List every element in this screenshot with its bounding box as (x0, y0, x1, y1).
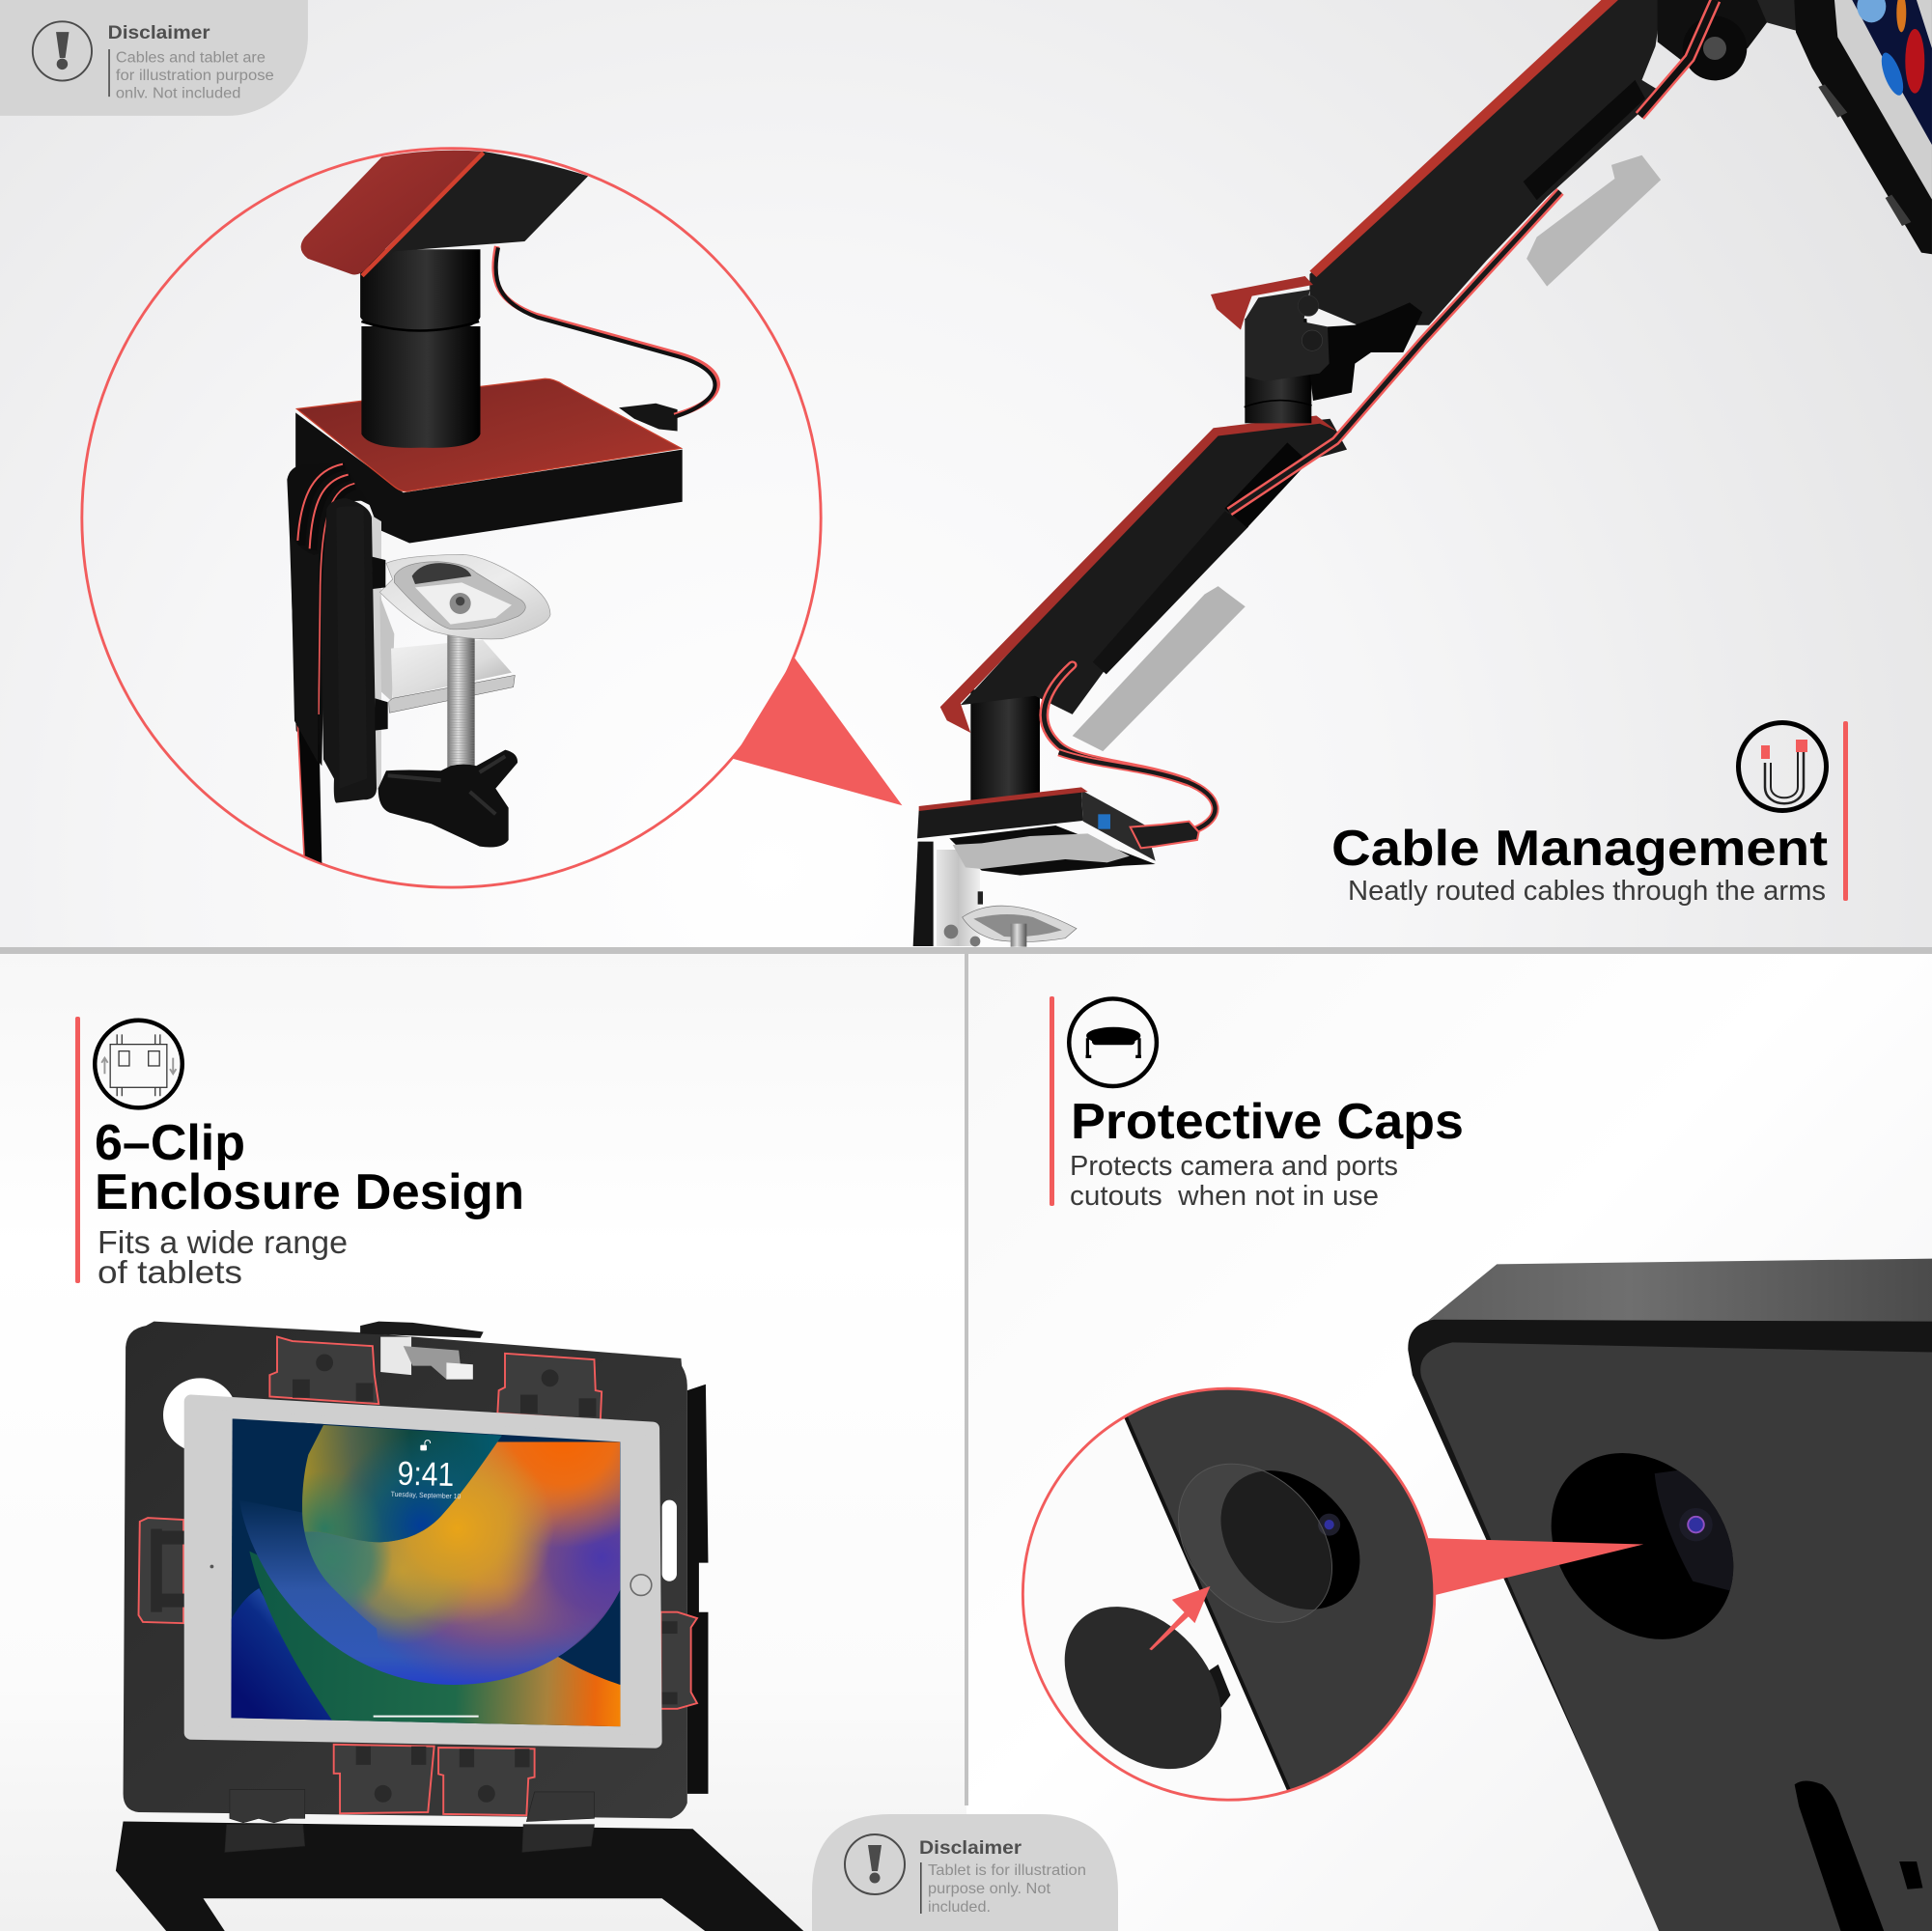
red arrow (1149, 1586, 1210, 1650)
feature: six clip (75, 1017, 524, 1290)
icon: warning circle (33, 21, 92, 81)
lock screen time: 9:41 (397, 1456, 455, 1494)
lower left panel background (0, 951, 966, 1931)
lower arm (961, 419, 1347, 714)
top right joint and tablet edge (1639, 0, 1932, 254)
clamp hardware (287, 463, 550, 863)
feature: cable management (1331, 721, 1848, 907)
monitor arm illustration (913, 0, 1932, 947)
pointer triangle (733, 658, 902, 805)
channel pocket (291, 531, 319, 763)
knuckle (1246, 290, 1330, 381)
disclaimer heading: Disclaimer (919, 1837, 1022, 1859)
six clips (139, 1337, 697, 1815)
underside (949, 826, 1156, 876)
hinges (225, 1789, 594, 1852)
side flange (687, 1385, 708, 1794)
base with USB port (913, 752, 1216, 947)
lock screen date: Tuesday, September 10 (391, 1490, 461, 1500)
subtitle: Fits a wide range (98, 1224, 348, 1260)
lower cable (1044, 665, 1188, 782)
metal spine (371, 515, 381, 790)
inner notch (302, 1425, 502, 1542)
home button (630, 1575, 652, 1595)
tablet enclosure illustration (116, 1322, 803, 1931)
subtitle: of tablets (98, 1254, 242, 1290)
disclaimer badge top left (0, 0, 308, 116)
rear face (1420, 1342, 1932, 1931)
clamp base block (295, 412, 683, 544)
heading: Cable Management (1331, 821, 1828, 877)
accent bar (75, 1017, 80, 1283)
upper metal pad (379, 554, 550, 639)
white cutouts (163, 1378, 238, 1452)
upper arm (1309, 0, 1663, 325)
disclaimer body (116, 51, 273, 98)
swoosh (301, 1441, 620, 1682)
disclaimer body: only. Not included (116, 85, 240, 101)
removed cover lower (1073, 586, 1246, 751)
cable (494, 246, 717, 417)
red base top (296, 378, 681, 491)
callout circle (1022, 1366, 1459, 1803)
removed cover upper (1526, 155, 1661, 287)
post and metal (937, 850, 980, 946)
icon: cable (1738, 722, 1827, 811)
block (917, 792, 1083, 838)
back slots (1795, 1780, 1884, 1931)
cable and plug (1059, 752, 1216, 830)
front cover (321, 498, 377, 803)
arm base black (360, 152, 588, 277)
lower cylinder (361, 326, 480, 448)
disclaimer body: Cables and tablet are (116, 49, 266, 66)
disclaimer heading: Disclaimer (108, 23, 210, 43)
green band (249, 1552, 621, 1728)
top panel background (0, 0, 1932, 951)
red wedge (1211, 276, 1313, 330)
tablet frame (1794, 0, 1932, 254)
zoom pointer (1428, 1538, 1643, 1595)
disclaimer body (928, 1862, 1086, 1916)
cable through arms (1229, 191, 1560, 512)
icon: warning circle (845, 1834, 905, 1894)
heading: 6–Clip (95, 1115, 245, 1171)
disclaimer body: purpose only. Not (928, 1881, 1051, 1897)
back plate (124, 1322, 687, 1818)
cables bundle (296, 464, 355, 863)
subtitle: cutouts when not in use (1070, 1181, 1379, 1212)
callout ring (82, 149, 821, 887)
tablet screen (222, 1410, 628, 1731)
accent bar (1050, 996, 1054, 1206)
lower cylinder (970, 689, 1040, 807)
cable slot (1224, 442, 1308, 528)
top face (1428, 1259, 1932, 1326)
tablet body (191, 1402, 656, 1742)
icon: clip enclosure (95, 1021, 182, 1107)
clip tabs (372, 557, 388, 731)
enclosure rear view (1022, 1259, 1932, 1931)
upper cylinder (360, 249, 480, 332)
disclaimer body: for illustration purpose (116, 68, 274, 84)
lower right panel background (966, 951, 1932, 1931)
loose cap (1033, 1576, 1253, 1800)
clip details (151, 1354, 678, 1803)
latch centre (360, 1322, 484, 1380)
heading: Enclosure Design (95, 1164, 524, 1220)
wing knob (378, 750, 518, 847)
disclaimer body: included. (928, 1899, 991, 1916)
elbow joint (1211, 191, 1560, 528)
rim (1408, 1320, 1932, 1931)
subtitle: Neatly routed cables through the arms (1348, 876, 1826, 907)
mechanism (1310, 302, 1422, 401)
disclaimer badge bottom (812, 1814, 1118, 1931)
plug behind plate (619, 404, 678, 431)
lower left blue shape (231, 1588, 333, 1721)
arm base red (301, 151, 484, 274)
disclaimer body: Tablet is for illustration (928, 1862, 1086, 1879)
USB port (1098, 814, 1110, 829)
heading: Protective Caps (1071, 1094, 1464, 1150)
accent bar (1843, 721, 1848, 901)
icon: unlock (420, 1441, 431, 1450)
subtitle: Protects camera and ports (1070, 1151, 1398, 1182)
open frame (116, 1822, 803, 1931)
post (1245, 319, 1311, 423)
large camera hole (1551, 1453, 1734, 1639)
threaded screw (447, 634, 475, 775)
feature: protective caps (1050, 996, 1464, 1212)
icon: cap (1069, 998, 1157, 1086)
callout: clamp close-up (82, 149, 902, 887)
rear channel (287, 463, 367, 766)
blue disc (239, 1441, 620, 1685)
lower bracket (391, 640, 512, 698)
